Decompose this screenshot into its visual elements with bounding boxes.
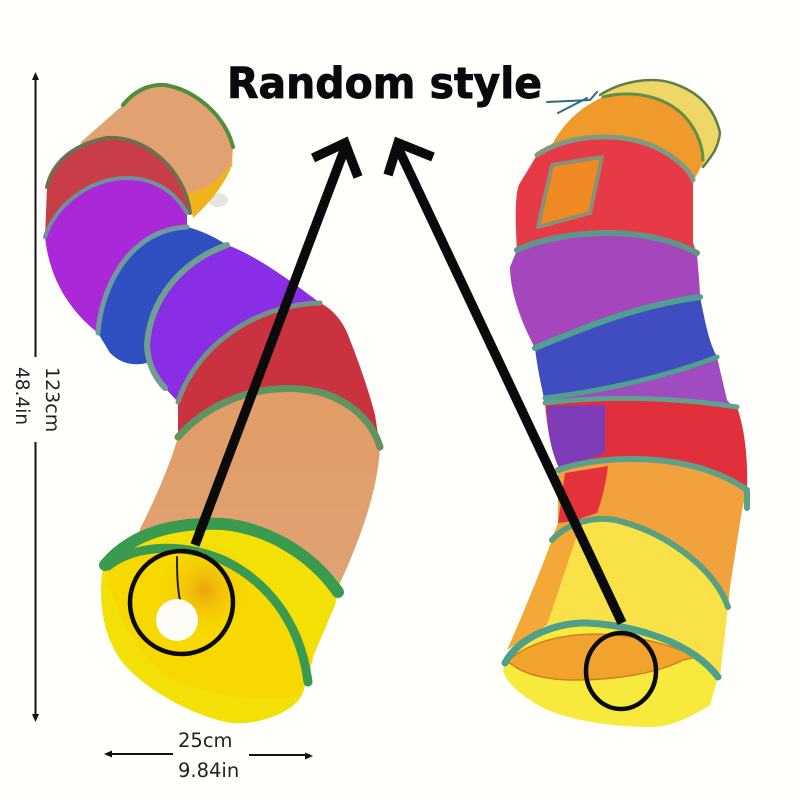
left tunnel: rims bbox=[45, 85, 380, 682]
width arrow bbox=[108, 754, 310, 755]
right tunnel: blue segment bbox=[535, 297, 720, 403]
title: Random style bbox=[227, 59, 542, 109]
arrow: left tunnel to title bbox=[195, 143, 358, 545]
left tunnel: inner shading bbox=[157, 540, 253, 640]
left tunnel: top orange segment bbox=[80, 85, 233, 193]
right tunnel: red segment bbox=[516, 137, 697, 253]
left tunnel: second purple segment bbox=[147, 245, 320, 402]
right tunnel: yellow segment bbox=[547, 517, 728, 677]
circle: left pom-pom highlight bbox=[130, 551, 233, 654]
right tunnel: yellow top end bbox=[600, 80, 720, 167]
circle: right opening highlight bbox=[586, 633, 656, 709]
left tunnel: red segment bbox=[45, 138, 190, 237]
left tunnel: hanging string bbox=[177, 557, 182, 608]
right tunnel: window bbox=[538, 157, 602, 227]
left tunnel: purple segment bbox=[45, 178, 187, 333]
height arrowheads bbox=[32, 72, 39, 722]
right tunnel: lower red segment bbox=[545, 398, 747, 490]
left tunnel: yellow end bbox=[101, 522, 340, 723]
right tunnel: yellow end bbox=[503, 623, 718, 727]
dimension: width bbox=[104, 729, 313, 782]
right tunnel: purple patch bbox=[547, 405, 605, 470]
height label: 123cm bbox=[41, 367, 63, 432]
width label: 25cm bbox=[178, 729, 233, 752]
right tunnel: purple sliver bbox=[545, 357, 733, 407]
width arrowheads bbox=[104, 750, 313, 760]
right tunnel: red patch bbox=[552, 466, 608, 540]
right rainbow tunnel bbox=[503, 80, 747, 727]
right tunnel: loose string bbox=[547, 92, 597, 113]
dimension: height bbox=[11, 72, 63, 722]
right tunnel: top orange segment bbox=[537, 94, 703, 182]
right tunnel: orange lower left band bbox=[507, 520, 585, 650]
right tunnel: orange segment bbox=[552, 459, 747, 607]
left tunnel: inner opening bbox=[105, 552, 313, 699]
left tunnel: white tip bbox=[208, 193, 228, 207]
right tunnel: rims bbox=[505, 80, 747, 677]
left tunnel: second red segment bbox=[178, 303, 380, 447]
width label in inches: 9.84in bbox=[178, 759, 239, 782]
left tunnel: white pom-pom ball bbox=[156, 599, 198, 641]
right tunnel: purple segment bbox=[510, 233, 700, 348]
height arrow bbox=[34, 76, 36, 718]
height label in inches: 48.4in bbox=[11, 367, 32, 425]
right tunnel: inner opening bbox=[507, 634, 697, 680]
left tunnel: large orange segment bbox=[103, 388, 380, 583]
left tunnel: yellow patch bbox=[186, 163, 233, 218]
left rainbow tunnel bbox=[45, 85, 380, 723]
arrow: right tunnel to title bbox=[388, 143, 622, 623]
left tunnel: blue segment bbox=[98, 227, 227, 364]
